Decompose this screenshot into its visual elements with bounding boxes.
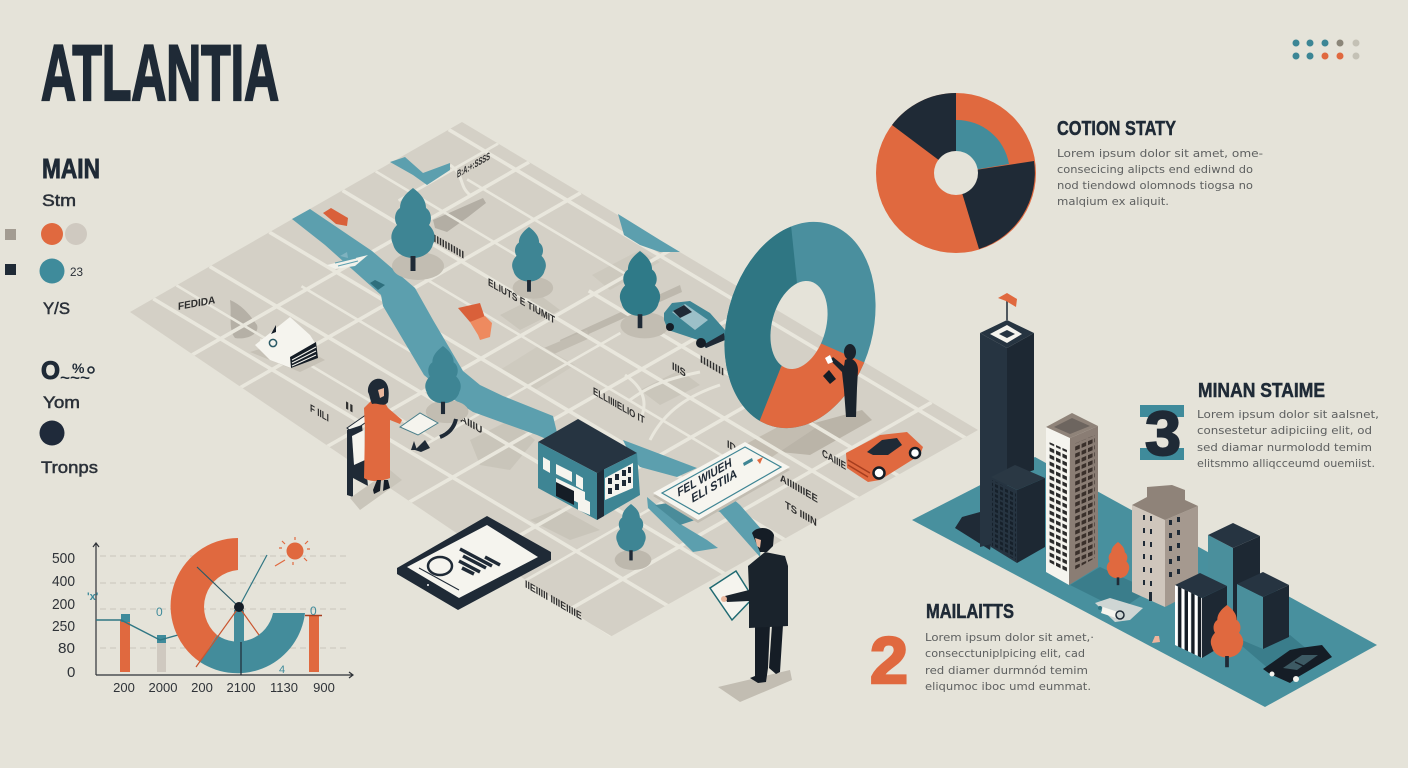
text block: mailaitts: consecctuniplpicing elit, cad [925,648,1085,660]
dark foot shapes [440,419,456,437]
y axis labels: 400 [52,573,75,590]
small teal marks: 4 [279,664,285,676]
x axis labels: 2000 [149,680,177,695]
river [292,209,762,557]
text block: cotion staty: nod tiendowd olomnods tiogsa no [1057,180,1253,192]
head [752,528,774,552]
street labels: IIIS [672,361,686,380]
teal small building [1237,572,1289,649]
percent glyph: O [41,357,60,385]
person body [364,379,402,494]
striped building [1175,573,1227,658]
text block: minan staime [1197,380,1379,470]
small teal marks: 'x' [87,591,99,603]
legend circle teal with value [40,258,83,284]
street labels: CAIIIE [822,448,846,473]
text block: minan staime: MINAN STAIME [1198,380,1325,402]
percent glyph: ~~~ [60,370,90,387]
orange car [846,432,923,482]
small teal marks: 0 [310,604,317,618]
percent glyph: % [72,360,85,376]
x axis labels: 900 [313,680,335,695]
percent glyph [41,357,94,387]
bars [120,614,322,672]
panel: pie chart top right [876,93,1036,253]
teal tall building [1208,523,1260,630]
small teal marks: 0 [156,605,163,619]
text block: cotion staty: consecicing alipcts end ediwnd do [1057,164,1253,176]
ground shadow [350,470,402,510]
panel: isometric city [912,293,1377,707]
text block: mailaitts: red diamer durmnód temim [925,665,1088,677]
text block: mailaitts [925,601,1094,693]
tree: map top [391,188,444,280]
label: y/s: Y/S [43,299,70,318]
tree: by river [425,346,468,423]
dark car [1263,645,1332,683]
donut ring [724,222,876,428]
street labels: II [345,400,354,416]
map base [130,122,978,637]
clipboard paper [400,413,438,435]
beige building [1132,485,1198,607]
hand [721,596,727,602]
map darker patches [230,198,872,540]
woman on donut [823,344,858,417]
3D donut chart with figure [724,222,876,428]
red marker small [323,208,348,226]
man with clipboard [710,528,792,702]
street labels: ELIUTS E TIUMIT [488,277,556,327]
building on map [538,419,640,520]
label: yom: Yom [43,393,80,412]
city platform [912,457,1377,707]
white landmark building [250,317,325,372]
legend circle dark [40,420,64,446]
x axis labels: 200 [113,680,135,695]
tablet [397,516,551,610]
upper canal [390,157,450,185]
text block: cotion staty: malqium ex aliquit. [1057,196,1169,208]
heading: main: MAIN [42,153,100,184]
woman with clipboard [347,379,456,510]
label: stm: Stm [42,191,76,210]
small device on platform [1095,598,1143,622]
street labels: AIIIIIIIEE [780,473,818,506]
x axis labels: 1130 [270,680,298,695]
decorative dots legend [1292,40,1360,60]
text block: minan staime: elitsmmo alliqcceumd ouemiist. [1197,458,1375,470]
document card: ELI STIIA [691,466,738,506]
trend line [96,620,178,640]
y axis labels: 200 [52,596,75,613]
number 3 badge: 3 [1145,400,1181,469]
grid lines [100,556,348,648]
street labels: IIIIIIII [700,354,724,379]
platform shadows [1070,567,1320,670]
tree: map middle [512,227,553,299]
boat on river [327,252,385,290]
text block: minan staime: consestetur adipiciing elit, od [1197,425,1372,437]
chart: combo bar and donut [52,537,353,695]
map road grid [152,128,966,637]
chart lines and hub [196,555,267,675]
sun icon [275,537,310,566]
tree: map lower [615,504,651,570]
legend squares [5,229,16,275]
tree: map right [620,251,669,338]
street labels: FEDIDA [178,295,216,313]
x axis labels: 2100 [227,680,255,695]
legend circles orange and beige [41,223,87,245]
y axis labels: 80 [58,640,75,657]
street labels: ELLIIIIELIO IT [593,386,645,427]
clipboard [710,571,753,620]
street labels: B:A:+:SSSS [457,150,490,181]
document card [653,442,790,523]
text block: mailaitts: MAILAITTS [926,601,1014,623]
upper-right pond [618,214,680,252]
orange tree large [1211,605,1243,667]
y axis labels: 500 [52,550,75,567]
text block: cotion staty: Lorem ipsum dolor sit amet, ome- [1057,148,1263,160]
panel: isometric street map [130,122,978,636]
x axis labels [113,680,335,695]
teal car [664,301,725,348]
text block: cotion staty: COTION STATY [1057,118,1177,140]
number 2: 2 [870,623,908,697]
text block: minan staime: sed diamar nurmolodd temim [1197,442,1372,454]
cone [1152,636,1160,643]
title: ATLANTIA [41,28,279,117]
document card: FEL WIUEH [677,455,732,500]
street labels: ID [727,439,736,455]
label: tronps: Tronps [41,458,98,477]
text block: minan staime: Lorem ipsum dolor sit aalsnet, [1197,409,1379,421]
axes [93,543,353,678]
y axis labels: 250 [52,618,75,635]
orange tree small [1107,542,1129,585]
stand [347,412,372,497]
y axis labels [52,550,75,681]
black tower [955,293,1034,550]
text block: cotion staty [1057,118,1263,208]
y axis labels: 0 [67,664,75,681]
panel: left legend [5,153,100,477]
street labels: IIEIIIII IIIIEIIIIE [525,579,582,623]
jacket [725,552,788,628]
street labels: TS IIIIN [785,500,817,530]
text block: mailaitts: Lorem ipsum dolor sit amet,· [925,632,1094,644]
half donut [171,538,305,673]
text block: mailaitts: eliqumoc iboc umd eummat. [925,681,1091,693]
dark low block [991,465,1045,563]
street labels: F IILI [310,403,329,425]
legend circle teal with value: 23 [70,267,83,279]
orange district patch [458,303,492,340]
street labels: AIIIU [460,413,482,437]
x axis labels: 200 [191,680,213,695]
legs [750,625,783,683]
white striped-window tower [1046,413,1098,585]
street labels: IIIIIIIIIIIII [428,230,464,262]
street labels [178,150,846,623]
small teal marks [87,591,317,676]
